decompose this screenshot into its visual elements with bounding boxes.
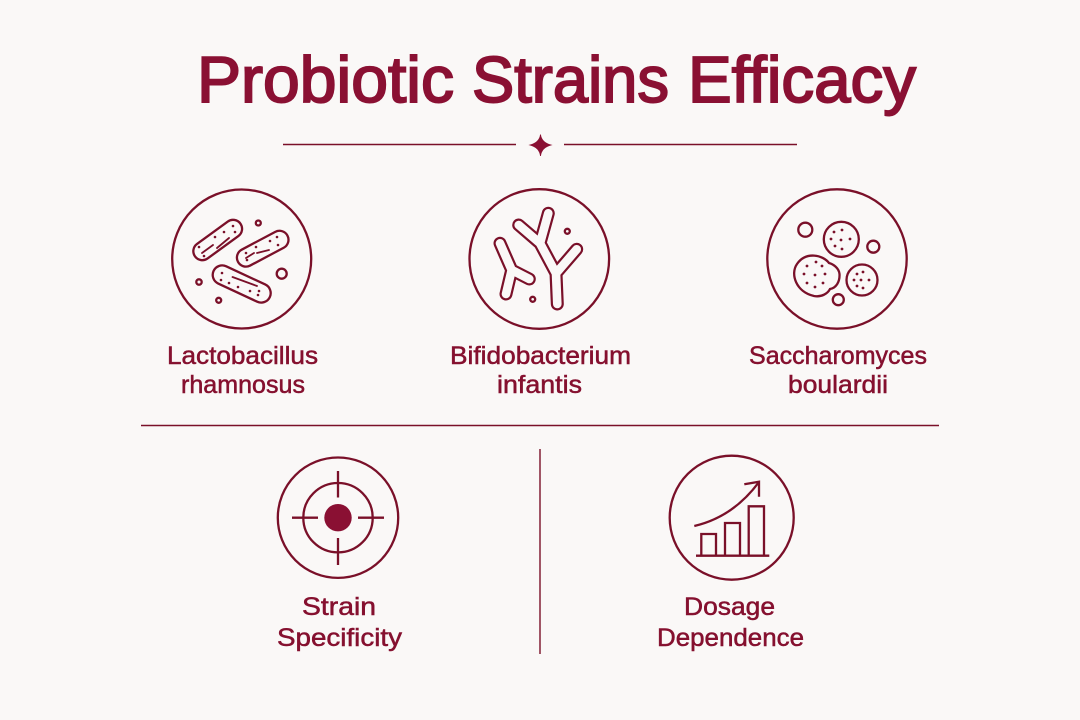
icon: Saccharomyces yeast cells bbox=[767, 189, 907, 329]
label: Lactobacillus rhamnosus: rhamnosus bbox=[181, 371, 305, 399]
label: Dosage Dependence bbox=[657, 593, 804, 652]
horizontal divider bbox=[141, 424, 939, 426]
label: Strain Specificity: Specificity bbox=[277, 624, 403, 652]
label: Lactobacillus rhamnosus: Lactobacillus bbox=[167, 342, 318, 370]
label: Dosage Dependence: Dependence bbox=[657, 624, 804, 652]
label: Bifidobacterium infantis: Bifidobacterium bbox=[450, 342, 631, 370]
label: Saccharomyces boulardii: Saccharomyces bbox=[749, 342, 927, 370]
title: Efficacy bbox=[688, 43, 917, 116]
vertical divider bbox=[539, 449, 541, 654]
label: Lactobacillus rhamnosus bbox=[167, 342, 318, 399]
title bbox=[197, 43, 917, 116]
label: Saccharomyces boulardii: boulardii bbox=[788, 371, 888, 399]
icon: Bifidobacterium branching bbox=[470, 189, 609, 329]
label: Bifidobacterium infantis bbox=[450, 342, 631, 399]
icon: Lactobacillus rods bbox=[172, 190, 311, 328]
label: Strain Specificity bbox=[277, 593, 403, 652]
label: Saccharomyces boulardii bbox=[749, 342, 927, 399]
title: Strains bbox=[472, 43, 669, 116]
title: Probiotic bbox=[197, 43, 454, 116]
icon: rising bar chart bbox=[670, 456, 794, 580]
label: Strain Specificity: Strain bbox=[302, 593, 376, 621]
label: Bifidobacterium infantis: infantis bbox=[497, 371, 582, 399]
icon: target bbox=[278, 458, 398, 578]
label: Dosage Dependence: Dosage bbox=[684, 593, 775, 621]
title divider with star bbox=[283, 134, 797, 156]
